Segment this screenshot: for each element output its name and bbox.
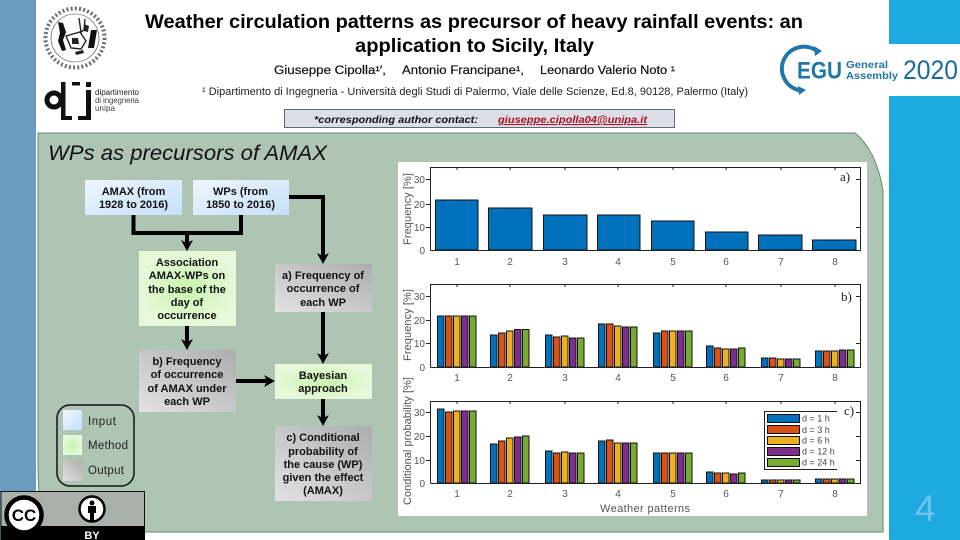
box: a) frequency output: each WP [300,297,346,309]
authors [274,65,675,77]
page number: 4 [915,488,936,529]
arrow: Bayesian to c) conditional [317,399,329,426]
chart b: frequency of AMAX under each WP: 2 [507,373,513,384]
contact box [284,110,674,128]
authors: Giuseppe Cipolla¹′, [274,65,386,77]
chart b: frequency of AMAX under each WP: b) [841,289,852,304]
chart b: frequency of AMAX under each WP: 1 [454,373,460,384]
chart a: frequency of occurrence: 5 [670,257,676,268]
box: association method: the base of the [148,284,226,296]
contact box: *corresponding author contact: [314,114,478,126]
chart c: conditional probability: 8 [832,489,838,500]
chart b: frequency of AMAX under each WP: 0 [419,363,425,374]
logo: EGU General Assembly 2020 [782,46,958,95]
flowchart [85,180,372,501]
box: association method: AMAX-WPs on [149,270,225,282]
box: AMAX input [85,180,182,215]
chart c legend: d = 12 h [802,446,835,456]
arrow: association to b) frequency [181,326,193,350]
chart a: frequency of occurrence: 4 [615,257,621,268]
arrow: WPs to a) frequency [289,197,329,264]
arrow: a) frequency to Bayesian [317,312,329,364]
panel heading: WPs as precursors of AMAX [48,142,328,165]
box: c) conditional probability output [275,426,372,501]
logo: university seal [46,8,104,68]
legend: flowchart key: Input [88,416,117,428]
logo: EGU General Assembly 2020: Assembly [846,70,898,82]
chart a: frequency of occurrence: 1 [454,257,460,268]
title [145,11,803,57]
box: association method: Association [156,257,218,269]
chart c: conditional probability: c) [844,403,854,418]
chart c: conditional probability: 7 [778,489,784,500]
chart b: frequency of AMAX under each WP: 3 [562,373,568,384]
charts panel [398,162,867,516]
chart c: conditional probability: 3 [562,489,568,500]
badge: CC BY licence [1,492,145,540]
box: b) frequency output: each WP [164,396,210,408]
chart c: conditional probability: 4 [615,489,621,500]
box: a) frequency output: a) Frequency of [282,270,364,282]
chart c legend: d = 3 h [802,425,830,435]
authors: Antonio Francipane¹, [402,65,524,77]
arrow: b) frequency to Bayesian [236,375,275,387]
logo: EGU General Assembly 2020: EGU [797,58,842,84]
chart c legend: d = 24 h [802,458,835,468]
chart a: frequency of occurrence: 20 [414,200,425,211]
logo: dipartimento di ingegneria: di ingegneria [95,96,140,105]
chart a: frequency of occurrence: 8 [832,257,838,268]
panel: WPs as precursors of AMAX [38,133,883,532]
chart c: conditional probability [402,377,860,515]
chart c: conditional probability: 1 [454,489,460,500]
box: c) conditional probability output: (AMAX) [303,485,343,497]
chart a: frequency of occurrence: 30 [414,175,425,186]
chart c legend [764,411,837,470]
contact box: giuseppe.cipolla04@unipa.it [497,114,648,126]
chart b: frequency of AMAX under each WP: 20 [414,316,425,327]
chart a: frequency of occurrence: a) [840,169,850,184]
box: b) frequency output [139,350,236,412]
chart a: frequency of occurrence: Frequency [%] [402,173,414,245]
legend: flowchart key: Method [88,440,128,452]
arrow: inputs to association [134,215,241,251]
legend: flowchart key [57,405,134,486]
chart a: frequency of occurrence: 10 [414,223,425,234]
logo: dipartimento di ingegneria [47,82,140,120]
chart c: conditional probability: Weather patterns [600,503,690,515]
logo: dipartimento di ingegneria: dipartimento [95,88,140,97]
title: application to Sicily, Italy [355,35,594,57]
logo: EGU General Assembly 2020: General [846,59,888,71]
chart c: conditional probability: 20 [414,432,425,443]
box: c) conditional probability output: given the effect [283,472,364,484]
box: Bayesian method [275,364,372,399]
box: WPs input: 1850 to 2016) [206,199,275,211]
chart c legend: d = 6 h [802,436,830,446]
box: c) conditional probability output: the cause (WP) [284,459,363,471]
chart c: conditional probability: 30 [414,408,425,419]
box: c) conditional probability output: probability of [288,446,358,458]
box: a) frequency output: occurrence of [287,283,360,295]
chart b: frequency of AMAX under each WP: 8 [832,373,838,384]
chart b: frequency of AMAX under each WP: 6 [723,373,729,384]
chart a: frequency of occurrence: 0 [419,246,425,257]
box: c) conditional probability output: c) Conditional [286,432,360,444]
box: b) frequency output: of occurrence [151,369,223,381]
box: association method: occurrence [157,310,217,322]
chart a: frequency of occurrence: 6 [723,257,729,268]
box: Bayesian method: approach [298,383,348,395]
badge: CC BY licence: CC [12,506,36,525]
chart c: conditional probability: 5 [670,489,676,500]
legend: flowchart key: Output [88,465,125,477]
chart c: conditional probability: 2 [507,489,513,500]
affiliation: ¹ Dipartimento di Ingegneria - Università degli Studi di Palermo, Viale delle Scienze, Ed.8, 90128, Palermo (Italy) [202,86,748,98]
box: WPs input [193,180,289,215]
chart b: frequency of AMAX under each WP: 4 [615,373,621,384]
title: Weather circulation patterns as precursor of heavy rainfall events: an [145,11,803,33]
right side band [889,0,960,540]
chart a: frequency of occurrence: 7 [778,257,784,268]
chart a: frequency of occurrence: 3 [562,257,568,268]
left side band [0,0,36,540]
chart b: frequency of AMAX under each WP: Frequency [%] [402,289,414,361]
logo: dipartimento di ingegneria: unipa [95,104,116,113]
box: association method [139,251,236,326]
box: b) frequency output: of AMAX under [147,383,227,395]
chart b: frequency of AMAX under each WP: 5 [670,373,676,384]
box: a) frequency output [275,264,372,312]
box: b) frequency output: b) Frequency [152,356,222,368]
chart a: frequency of occurrence [402,167,860,268]
chart b: frequency of AMAX under each WP [402,284,860,384]
chart c: conditional probability: Conditional probability [%] [402,377,414,505]
chart a: frequency of occurrence: 2 [507,257,513,268]
box: association method: day of [171,297,204,309]
chart c legend: d = 1 h [802,414,830,424]
authors: Leonardo Valerio Noto ¹ [540,65,675,77]
chart b: frequency of AMAX under each WP: 30 [414,292,425,303]
box: AMAX input: 1928 to 2016) [99,199,168,211]
box: WPs input: WPs (from [213,186,268,198]
box: Bayesian method: Bayesian [299,370,347,382]
chart c: conditional probability: 10 [414,456,425,467]
chart b: frequency of AMAX under each WP: 10 [414,339,425,350]
chart b: frequency of AMAX under each WP: 7 [778,373,784,384]
box: AMAX input: AMAX (from [102,186,165,198]
chart c: conditional probability: 6 [723,489,729,500]
chart c: conditional probability: 0 [419,479,425,490]
